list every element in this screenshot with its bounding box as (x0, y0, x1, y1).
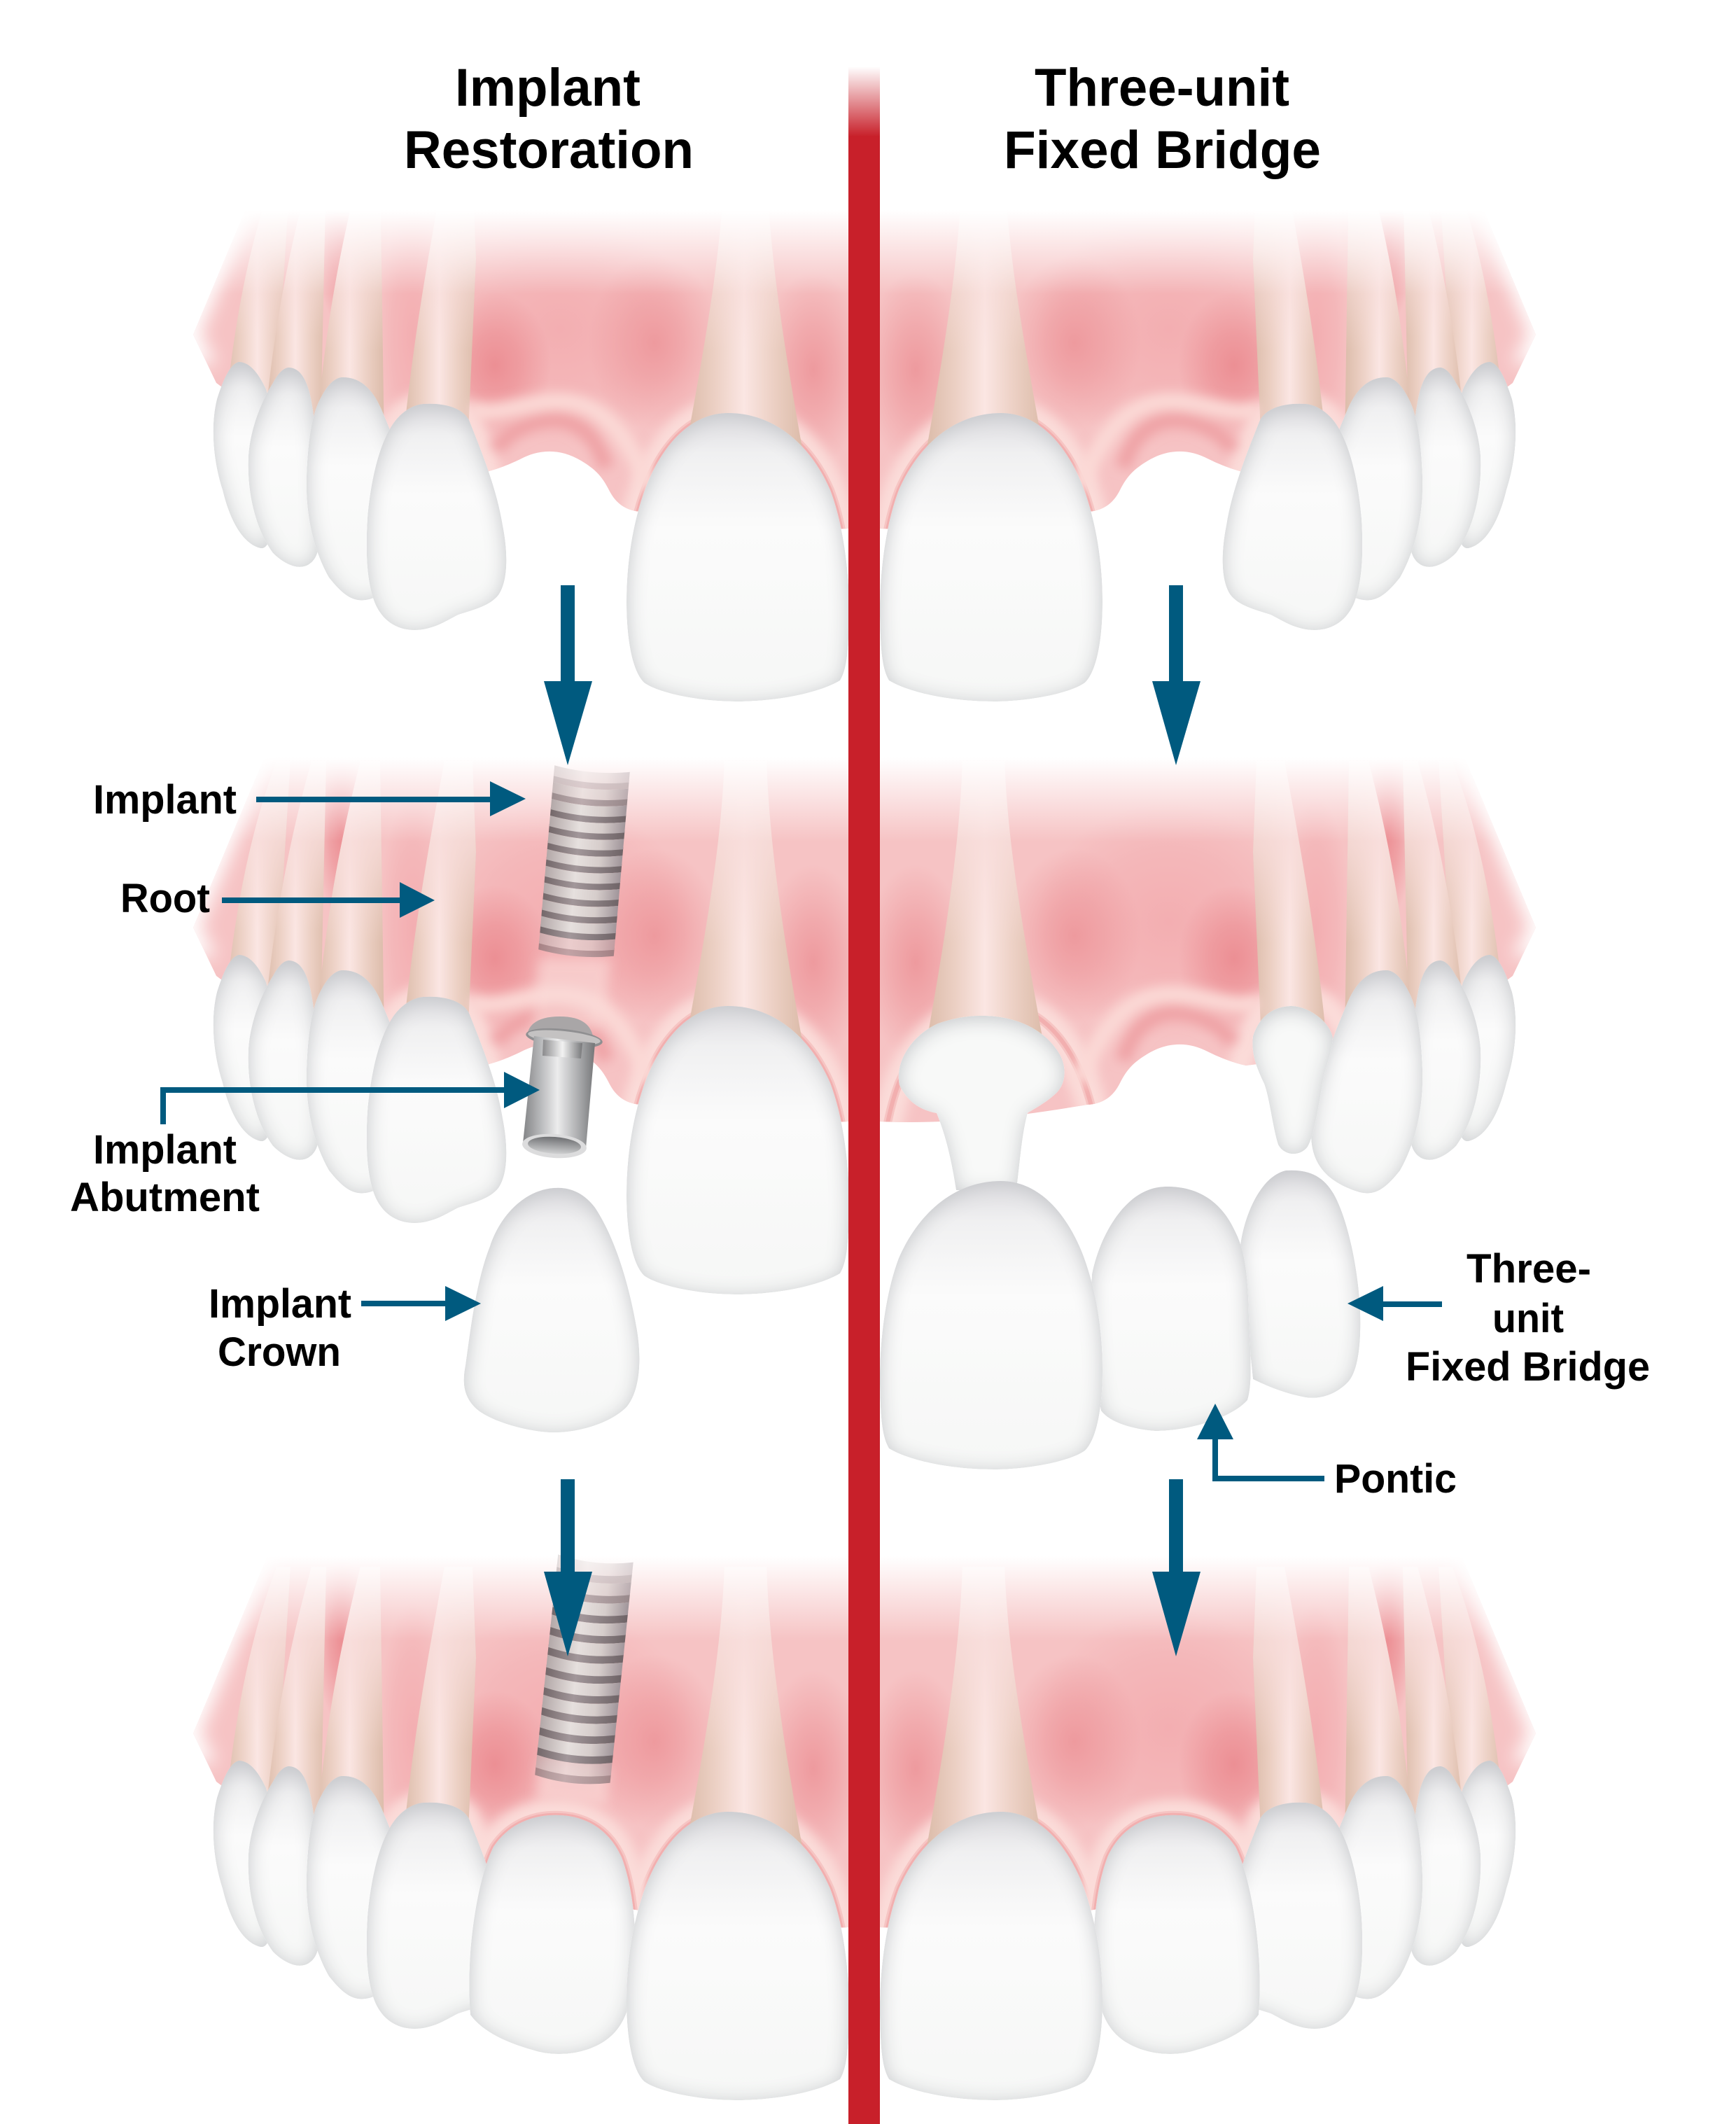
label: Implant Crown with arrow: Crown (218, 1329, 341, 1375)
icon: three-unit fixed bridge (880, 1171, 1360, 1469)
label: Three-unit Fixed Bridge with arrow: Fixed Bridge (1406, 1344, 1650, 1390)
implant socket shaft placed (536, 1761, 610, 1806)
title: Implant Restoration (404, 58, 694, 180)
label: Implant Crown with arrow: Implant (209, 1281, 351, 1327)
label: Implant Abutment with arrow (70, 1072, 540, 1220)
icon: implant screw placed (535, 1554, 634, 1787)
jaw illustration: completed bridge (863, 1549, 1589, 2100)
arrow: step 2 to step 3, right (1152, 1479, 1200, 1656)
jaw illustration: upper jaw with missing tooth, right (863, 151, 1589, 701)
icon: implant crown (464, 1188, 640, 1432)
panel: right column, three-unit fixed bridge (863, 58, 1650, 2100)
label: Three-unit Fixed Bridge with arrow (1348, 1246, 1650, 1390)
label: Implant with arrow: Implant (93, 777, 237, 823)
title: Three-unit Fixed Bridge: Three-unit (1035, 58, 1289, 118)
arrow: step 1 to step 2, left (544, 585, 592, 765)
label: Pontic with arrow: Pontic (1334, 1456, 1457, 1502)
label: Pontic with arrow (1197, 1404, 1457, 1502)
arrow: step 1 to step 2, right (1152, 585, 1200, 765)
icon: prepared premolar stump (1252, 1006, 1333, 1154)
panel: left column, implant restoration (70, 58, 866, 2100)
icon: implant screw (538, 765, 630, 960)
label: Implant Abutment with arrow: Implant (93, 1127, 237, 1173)
jaw illustration: implant components, left (140, 743, 866, 1294)
arrow: step 2 to step 3, left (544, 1479, 592, 1656)
label: Three-unit Fixed Bridge with arrow: unit (1492, 1296, 1564, 1341)
divider: red vertical bar (848, 67, 880, 2124)
label: Root with arrow (120, 876, 435, 921)
icon: prepared central tooth stump (899, 1016, 1065, 1190)
label: Implant Crown with arrow (209, 1281, 481, 1375)
title: Three-unit Fixed Bridge: Fixed Bridge (1004, 120, 1321, 180)
label: Root with arrow: Root (120, 876, 210, 921)
label: Implant Abutment with arrow: Abutment (70, 1175, 260, 1220)
title: Implant Restoration: Restoration (404, 120, 694, 180)
jaw illustration: prepared teeth, right (863, 743, 1589, 1294)
label: Three-unit Fixed Bridge with arrow: Three- (1466, 1246, 1591, 1292)
title: Implant Restoration: Implant (455, 58, 640, 118)
jaw illustration: upper jaw with missing tooth, left (140, 151, 866, 701)
icon: implant abutment (522, 1016, 603, 1160)
implant socket shaft (532, 959, 610, 1029)
label: Implant with arrow (93, 777, 526, 823)
jaw illustration: completed implant restoration (140, 1549, 866, 2100)
title: Three-unit Fixed Bridge (1004, 58, 1321, 180)
